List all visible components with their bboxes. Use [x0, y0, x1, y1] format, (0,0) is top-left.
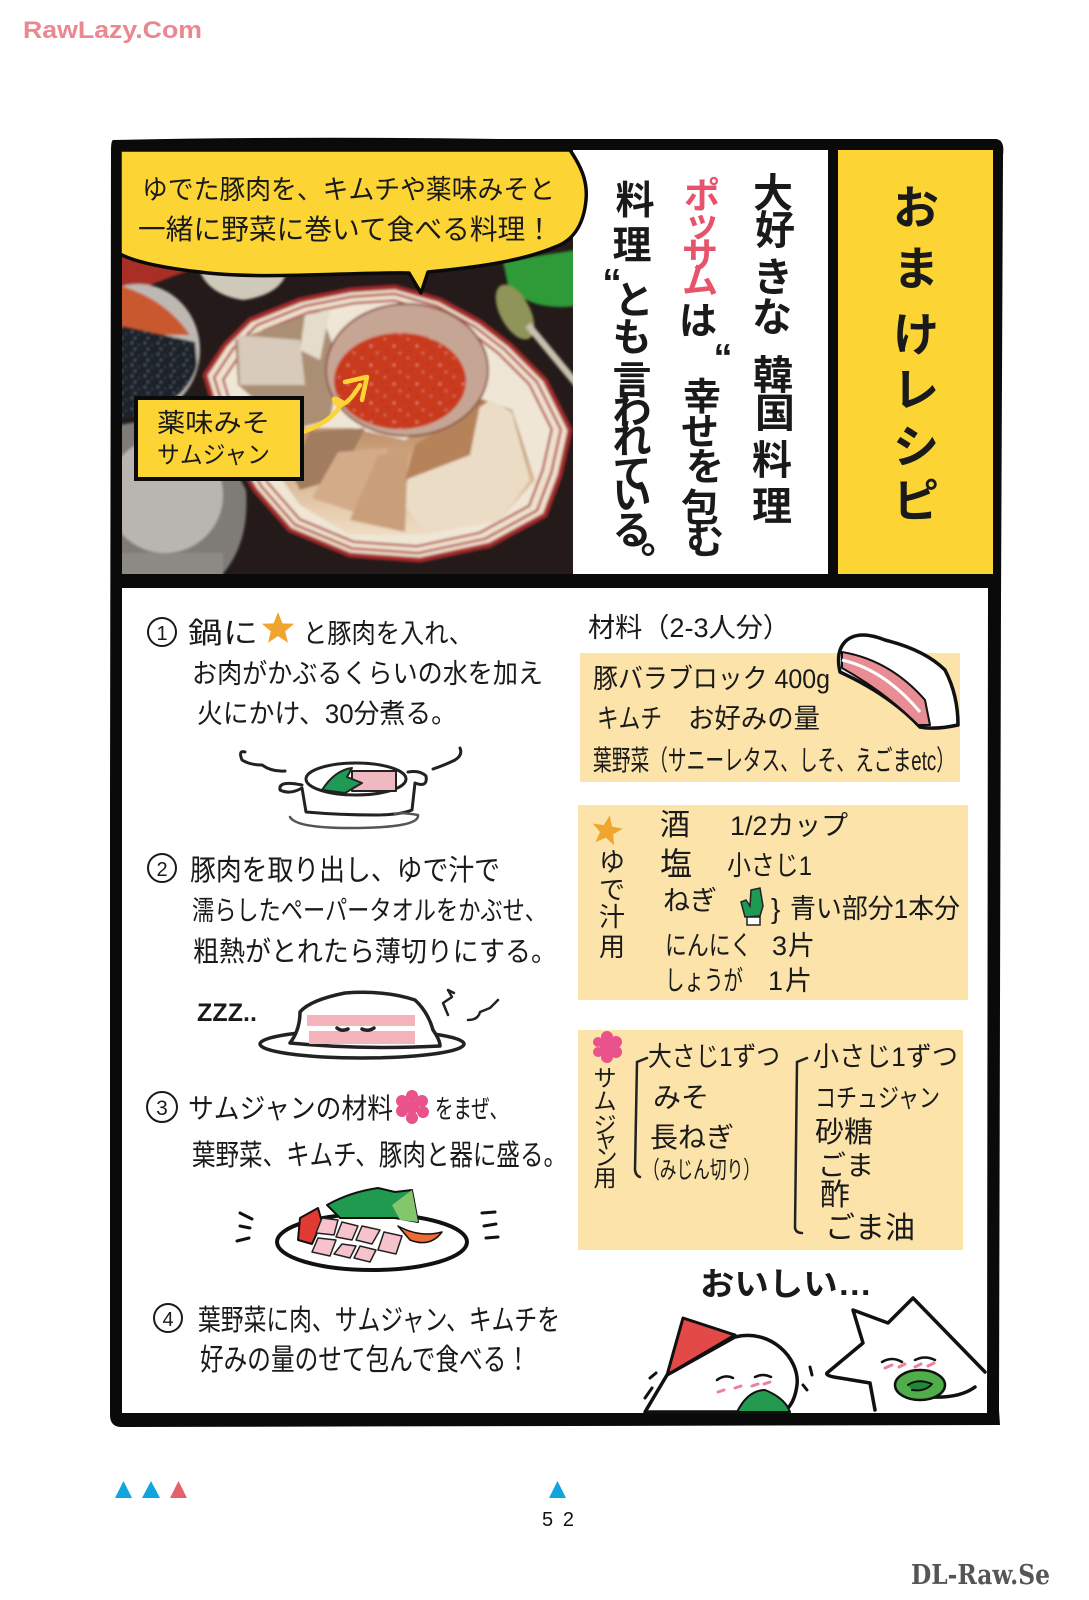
step 3 — [147, 1090, 567, 1172]
photo: pork slices — [235, 310, 535, 535]
illustration: plated pork with vegetables — [237, 1188, 498, 1270]
icon: orange star — [262, 612, 294, 643]
illustration: sleeping pork under paper towel — [260, 990, 498, 1058]
vertical label: サムジャン用: サムジャン用 — [594, 1065, 618, 1191]
bracket: tablespoon group — [635, 1058, 647, 1177]
character: white bird with red hat eating wrap — [645, 1318, 812, 1412]
step 3 text line 2: 葉野菜、キムチ、豚肉と器に盛る。 — [192, 1139, 567, 1172]
step 1 text line 2: お肉がかぶるくらいの水を加え — [192, 659, 543, 689]
panel: yellow title background — [838, 150, 993, 574]
icon: green onion — [741, 888, 763, 925]
ingredient: pork belly: 豚バラブロック 400g — [593, 664, 830, 694]
intro column 2 vertical text: は“幸せを包む — [679, 301, 732, 563]
page number: 52 — [542, 1509, 574, 1531]
heading: tablespoon group: 大さじ1ずつ — [648, 1042, 780, 1072]
panel: white intro text background — [573, 150, 829, 574]
ingredient: sugar: 砂糖 — [815, 1116, 873, 1149]
intro column 1 vertical text: 大好きな韓国料理 — [752, 172, 795, 529]
amount: garlic: 3片 — [772, 931, 815, 961]
step 3 number — [147, 1092, 177, 1122]
watermark: DL-Raw.Se: DL-Raw.Se — [911, 1560, 1050, 1591]
panel: boiling broth ingredients — [578, 805, 968, 1000]
amount: salt: 小さじ1 — [727, 851, 812, 881]
icon: orange star — [590, 813, 625, 846]
bracket and green-part note: } — [771, 893, 780, 924]
step 1 text line 1b: と豚肉を入れ、 — [303, 619, 473, 649]
intro column 3 vertical text: 料理“とも言われている。 — [602, 180, 680, 562]
photo: spoon and chopsticks — [494, 282, 573, 388]
speech bubble: description of dish — [120, 150, 586, 293]
step 3 text line 1b: をまぜ、 — [435, 1094, 508, 1124]
bubble text line 2: 一緒に野菜に巻いて食べる料理！ — [138, 214, 553, 245]
callout: samjang label — [136, 398, 302, 479]
bubble text line 1: ゆでた豚肉を、キムチや薬味みそと — [142, 175, 555, 205]
step 1 number — [148, 618, 176, 646]
photo: small white bowl — [200, 272, 287, 300]
ingredient note: minced: （みじん切り） — [643, 1157, 760, 1184]
step 4 text line 1: 葉野菜に肉、サムジャン、キムチを — [198, 1304, 560, 1337]
step 2 text line 2: 濡らしたペーパータオルをかぶせ、 — [192, 896, 547, 926]
ingredient: sesame: ごま — [818, 1150, 874, 1181]
photo: plate — [205, 287, 570, 560]
step 2 text line 3: 粗熱がとれたら薄切りにする。 — [193, 936, 557, 967]
step 4 text line 2: 好みの量のせて包んで食べる！ — [200, 1344, 530, 1377]
amount: ginger: 1片 — [768, 966, 812, 996]
callout text line 1: 薬味みそ — [157, 408, 270, 438]
step 4 number: 4 — [162, 1309, 174, 1331]
intro column 2 pink text: ポッサム: ポッサム — [682, 175, 720, 301]
step 3 text line 1a: サムジャンの材料 — [188, 1093, 393, 1124]
step 4 — [154, 1304, 560, 1377]
icon: pork belly block — [839, 635, 958, 728]
step 2 — [148, 854, 557, 967]
step 1 number: 1 — [156, 623, 168, 645]
page edge marker triangles — [115, 1481, 566, 1498]
panel: main ingredients — [580, 653, 960, 782]
step 1 text line 1a: 鍋に — [188, 617, 258, 650]
zzz sleep text: ZZZ.. — [197, 999, 257, 1027]
amount: sake: 1/2カップ — [730, 811, 848, 841]
ingredient: sesame oil: ごま油 — [825, 1212, 915, 1245]
step 2 number — [148, 854, 176, 882]
ingredient: green onion: ねぎ — [663, 886, 717, 916]
character: white cat-like creature eating wrap — [827, 1298, 985, 1412]
panel: samjang ingredients — [578, 1030, 963, 1250]
step 4 number — [154, 1304, 182, 1332]
ingredient: kimchi: キムチ — [597, 704, 662, 734]
ingredient: sake: 酒 — [660, 809, 690, 842]
photo: metal bowl — [107, 420, 246, 577]
step 1 text line 3: 火にかけ、30分煮る。 — [197, 699, 457, 729]
photo panel: boiled pork on plate — [122, 150, 573, 574]
photo: side bowl with kimchi and nori — [122, 282, 202, 420]
amount: green onion: 青い部分1本分 — [790, 894, 960, 924]
illustration: pot with pork and leek — [241, 748, 461, 828]
icon: pink flower — [396, 1090, 429, 1124]
photo: small red dish top left — [122, 257, 188, 288]
photo: glass bowl with samjang sauce — [326, 304, 488, 436]
step 2 text line 1: 豚肉を取り出し、ゆで汁で — [190, 854, 500, 887]
title: おまけレシピ vertical: おまけレシピ — [893, 182, 939, 527]
step 2 number: 2 — [156, 859, 168, 881]
ingredient: long onion: 長ねぎ — [650, 1122, 734, 1153]
bracket: teaspoon group — [795, 1058, 807, 1233]
icon: pink flower — [593, 1031, 622, 1063]
vertical label: ゆで汁用: ゆで汁用 — [599, 847, 625, 962]
callout text line 2: サムジャン — [157, 442, 270, 469]
ingredient: miso: みそ — [653, 1082, 709, 1113]
ingredient: salt: 塩 — [660, 846, 692, 882]
ingredient: ginger: しょうが — [665, 966, 743, 996]
ingredient: gochujang: コチュジャン — [815, 1083, 940, 1113]
arrow: from label to sauce — [303, 377, 367, 432]
watermark: RawLazy.Com: RawLazy.Com — [23, 17, 202, 44]
speech: おいしい…: おいしい… — [700, 1266, 872, 1302]
frame: thick black hand-drawn border — [110, 138, 1003, 1427]
photo: green pepper — [503, 250, 576, 307]
heading: ingredients: 材料（2-3人分） — [588, 613, 790, 643]
ingredient: vinegar: 酢 — [820, 1179, 850, 1212]
ingredient: garlic: にんにく — [665, 931, 752, 961]
step 3 number: 3 — [156, 1097, 168, 1120]
heading: teaspoon group: 小さじ1ずつ — [813, 1042, 958, 1072]
step 1 — [148, 612, 543, 729]
ingredient: kimchi amount: お好みの量 — [688, 704, 820, 734]
